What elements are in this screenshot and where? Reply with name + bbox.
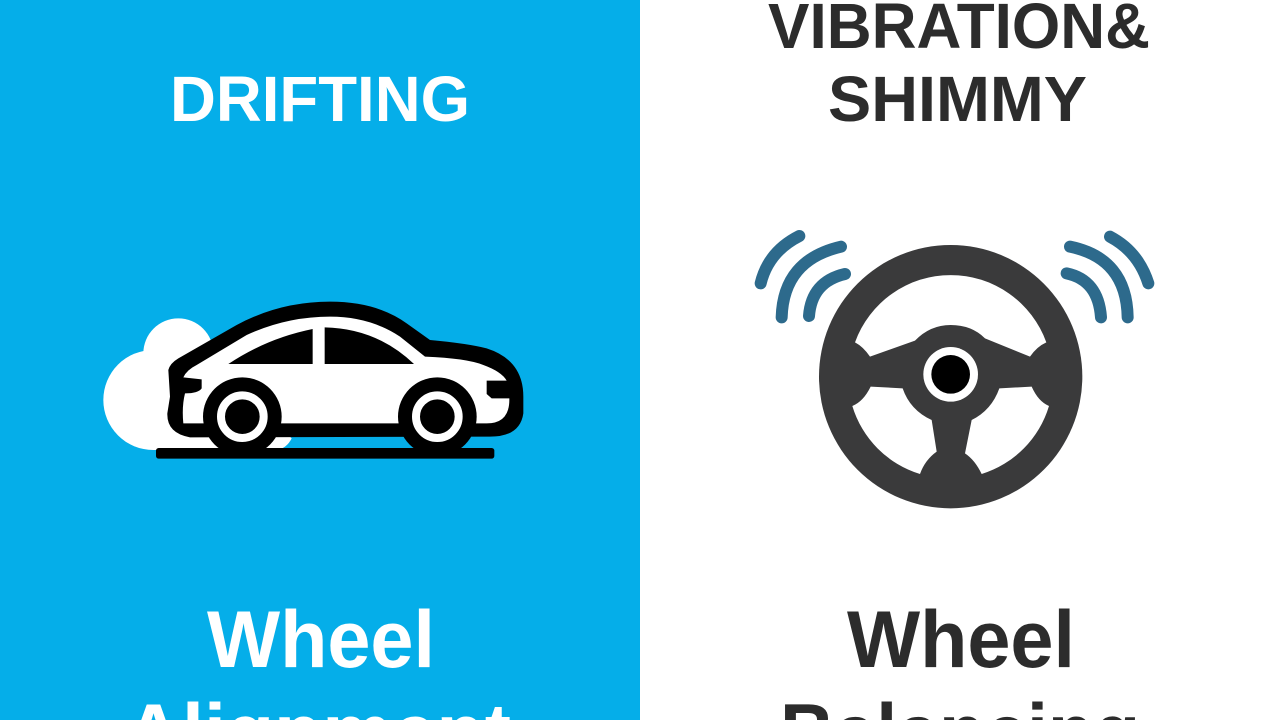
icon: vibration waves [761, 236, 1148, 317]
icon: smoke cloud [103, 318, 292, 450]
icon: car body [167, 302, 523, 437]
heading: vibration and shimmy: SHIMMY [828, 63, 1087, 135]
label: wheel balancing [780, 595, 1140, 720]
icon: steering wheel rim and spokes [819, 245, 1082, 508]
heading: drifting: DRIFTING [170, 63, 470, 135]
icon: vibrating steering wheel [761, 236, 1148, 508]
panel: vibration and shimmy [640, 0, 1280, 720]
icon: front wheel [398, 377, 477, 456]
icon: car with smoke cloud [103, 302, 523, 459]
icon: steering hub [923, 347, 978, 402]
label: wheel balancing: Wheel [847, 595, 1075, 685]
panel: drifting [0, 0, 640, 720]
label: wheel alignment [125, 595, 511, 720]
icon: road line [156, 448, 494, 459]
icon: rear wheel [203, 377, 282, 456]
label: wheel alignment: Wheel [207, 595, 435, 685]
heading: vibration and shimmy [768, 0, 1150, 135]
